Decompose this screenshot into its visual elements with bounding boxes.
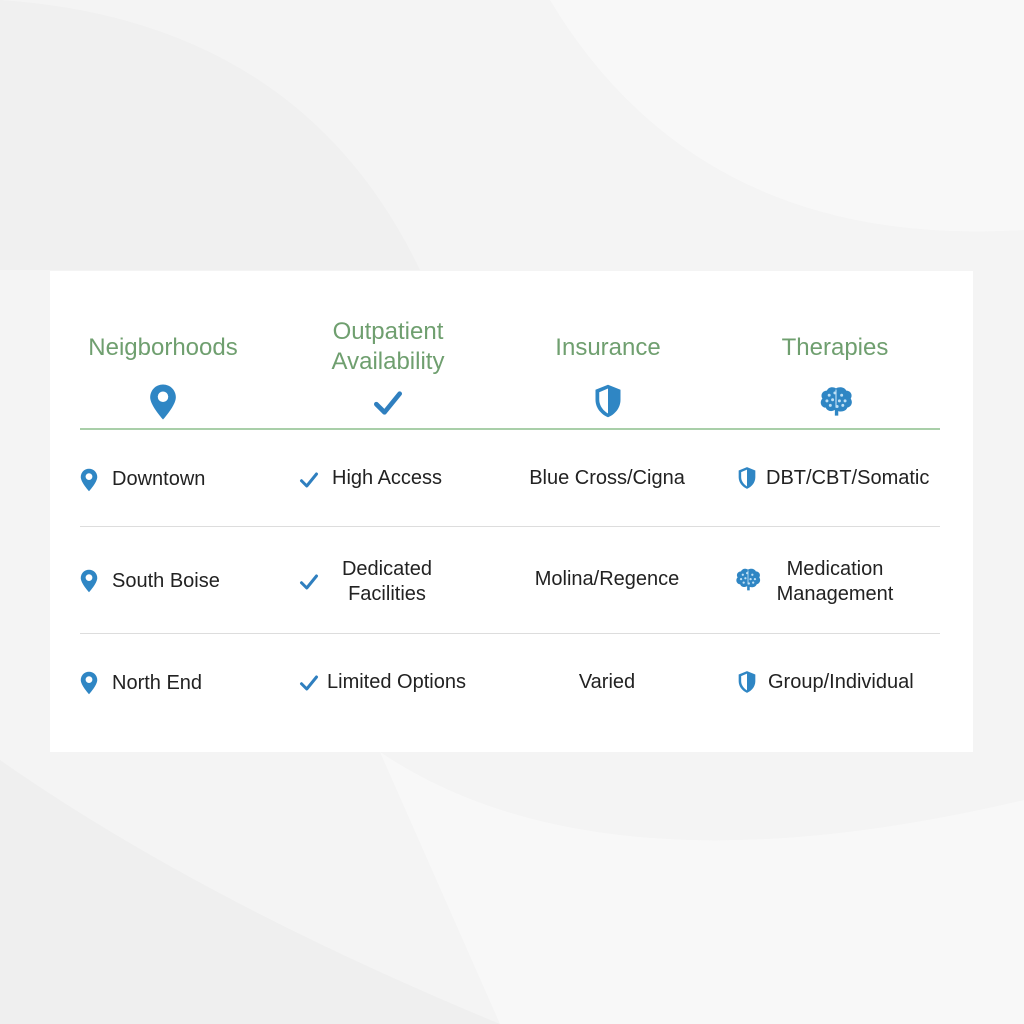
panel: comparison table: Dedicated: [342, 558, 432, 580]
heading: Neighborhoods: Neigborhoods: [88, 334, 238, 361]
panel: comparison table: Molina/Regence: [535, 568, 679, 590]
heading: Outpatient Availability: Availability: [332, 348, 444, 375]
panel: comparison table: North End: [112, 672, 202, 694]
icon: header brain: [820, 387, 852, 416]
panel: comparison table: Blue Cross/Cigna: [529, 467, 685, 489]
panel: comparison table: Management: [777, 583, 893, 605]
row 3: [80, 671, 914, 694]
panel: comparison table: [50, 271, 973, 752]
panel: comparison table: Group/Individual: [768, 671, 914, 693]
panel: comparison table: Medication: [787, 558, 883, 580]
heading: Outpatient Availability: Outpatient: [333, 318, 443, 345]
panel: comparison table: DBT/CBT/Somatic: [766, 467, 929, 489]
icon: header check: [374, 391, 402, 415]
heading: Therapies: Therapies: [782, 334, 888, 361]
heading: Outpatient Availability: [332, 318, 444, 375]
icon: header shield: [596, 384, 620, 418]
panel: comparison table: Varied: [579, 671, 635, 693]
row 1: [80, 467, 929, 492]
row 2: [80, 558, 894, 605]
icon: header pin: [150, 384, 176, 420]
panel: comparison table: Facilities: [348, 583, 426, 605]
heading: Insurance: Insurance: [555, 334, 661, 361]
panel: comparison table: Downtown: [112, 468, 205, 490]
panel: comparison table: Limited Options: [327, 671, 466, 693]
panel: comparison table: South Boise: [112, 570, 220, 592]
panel: comparison table: High Access: [332, 467, 442, 489]
